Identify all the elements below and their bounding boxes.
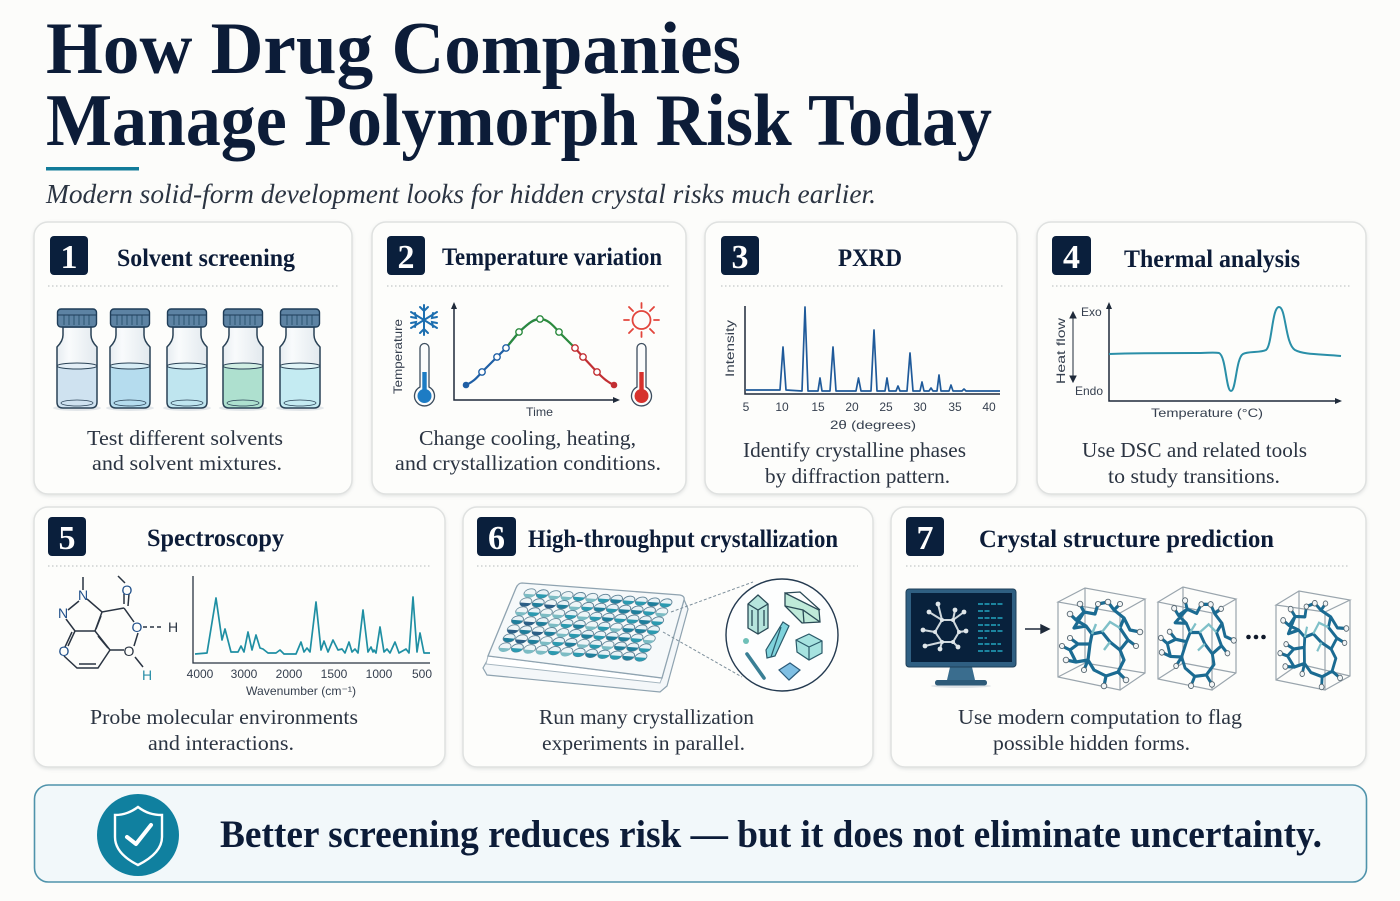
heading: PXRD	[838, 245, 902, 272]
crystal cell 1	[1058, 588, 1145, 690]
molecule structure: N	[58, 605, 68, 621]
description: Use modern computation to flag	[958, 705, 1242, 729]
description: and solvent mixtures.	[92, 451, 282, 475]
molecule structure	[58, 576, 178, 683]
description: Probe molecular environments	[90, 705, 358, 729]
badge 3	[721, 236, 759, 276]
description	[1082, 438, 1307, 488]
tiny speck	[743, 638, 749, 644]
molecule structure: O	[122, 582, 133, 598]
panel: high-throughput crystallization	[463, 507, 873, 767]
description: to study transitions.	[1108, 464, 1280, 488]
exo and endo labels	[1075, 305, 1103, 398]
molecule structure: H	[142, 667, 152, 683]
molecule structure: O	[132, 619, 143, 635]
panel: temperature variation	[372, 222, 686, 494]
description	[539, 705, 754, 755]
y axis label: Heat flow	[1054, 318, 1068, 384]
icon: hot thermometer	[632, 344, 652, 406]
badge 6: 6	[488, 520, 505, 557]
axis ticks	[743, 400, 996, 414]
axis ticks: 500	[412, 667, 432, 681]
icon: cold thermometer	[414, 344, 435, 406]
magnifier leader lines	[663, 582, 753, 677]
x axis label: 2θ (degrees)	[830, 418, 916, 432]
description	[90, 705, 358, 755]
icon: five solvent vials	[53, 309, 324, 411]
heading: Temperature variation	[442, 244, 662, 271]
flat tile crystal	[779, 663, 800, 680]
needle prism crystal	[766, 622, 789, 658]
description	[958, 705, 1242, 755]
description: Run many crystallization	[539, 705, 754, 729]
axis ticks: 40	[982, 400, 996, 414]
title	[46, 8, 992, 162]
axis ticks: 1500	[321, 667, 348, 681]
badge 4: 4	[1063, 239, 1080, 276]
badge 3: 3	[732, 239, 748, 276]
heading: High-throughput crystallization	[528, 526, 838, 553]
badge 4	[1052, 236, 1091, 276]
axis ticks: 1000	[366, 667, 393, 681]
molecule structure: H	[168, 619, 178, 635]
icon: shield with check	[97, 794, 179, 876]
line chart: temperature over time	[451, 302, 620, 403]
banner: key takeaway	[34, 785, 1366, 882]
thin rod crystal	[747, 654, 764, 678]
axis ticks: 25	[879, 400, 893, 414]
badge 1	[50, 236, 88, 276]
axis ticks: 30	[913, 400, 927, 414]
axis ticks: 10	[775, 400, 789, 414]
axis ticks: 2000	[276, 667, 303, 681]
panel: spectroscopy	[34, 507, 445, 767]
badge 5: 5	[58, 520, 76, 557]
x axis label: Time	[526, 405, 553, 419]
badge 7: 7	[916, 520, 934, 557]
panel: crystal structure prediction	[891, 507, 1366, 767]
cube crystal	[796, 634, 822, 660]
axis ticks: 20	[845, 400, 859, 414]
description: by diffraction pattern.	[765, 464, 950, 488]
description	[87, 426, 283, 475]
molecule structure: O	[59, 643, 70, 659]
axis ticks: 35	[948, 400, 962, 414]
description: possible hidden forms.	[993, 731, 1190, 755]
axis ticks: 4000	[187, 667, 214, 681]
description	[743, 438, 966, 488]
crystal cell 3	[1272, 591, 1356, 696]
panel: thermal analysis	[1037, 222, 1366, 494]
heat flow arrow	[1070, 312, 1076, 382]
description: and crystallization conditions.	[395, 451, 661, 475]
heading: Spectroscopy	[147, 525, 284, 552]
hexagonal prism crystal	[748, 595, 768, 634]
axis ticks: 3000	[231, 667, 258, 681]
molecule structure: N	[78, 587, 88, 603]
badge 2	[387, 236, 425, 276]
description: Test different solvents	[87, 426, 283, 450]
description: and interactions.	[148, 731, 294, 755]
panel: PXRD	[705, 222, 1017, 494]
exo and endo labels: Exo	[1081, 305, 1102, 319]
axis ticks	[187, 667, 432, 681]
heading: Thermal analysis	[1124, 246, 1300, 273]
badge 1: 1	[60, 239, 78, 276]
magnified crystals	[726, 579, 838, 691]
y axis label: Intensity	[723, 320, 737, 377]
crystal cell 2	[1150, 587, 1243, 697]
block crystal	[785, 592, 820, 623]
panel: solvent screening	[34, 222, 352, 494]
takeaway text: Better screening reduces risk — but it does not eliminate uncertainty.	[220, 813, 1322, 856]
description: Use DSC and related tools	[1082, 438, 1307, 462]
exo and endo labels: Endo	[1075, 384, 1103, 398]
heading: Solvent screening	[117, 245, 295, 272]
x axis label: Temperature (°C)	[1151, 406, 1263, 420]
icon: computer monitor	[906, 589, 1016, 688]
description: Identify crystalline phases	[743, 438, 966, 462]
heading: Crystal structure prediction	[979, 526, 1274, 553]
icon: well plate	[483, 583, 688, 692]
ellipsis	[1246, 635, 1266, 639]
icon: snowflake	[411, 305, 437, 335]
badge 6	[477, 517, 516, 557]
description: experiments in parallel.	[542, 731, 745, 755]
badge 7	[906, 517, 944, 557]
y axis label: Temperature	[391, 319, 405, 394]
chart: DSC curve	[1106, 302, 1342, 404]
axis ticks: 5	[743, 400, 750, 414]
axis ticks: 15	[811, 400, 825, 414]
chart: diffraction pattern	[745, 306, 1000, 394]
badge 5	[48, 517, 86, 557]
subtitle: Modern solid-form development looks for hidden crystal risks much earlier.	[45, 179, 876, 209]
arrow	[1025, 625, 1049, 633]
description	[395, 426, 661, 475]
title: How Drug Companies	[46, 8, 741, 90]
chart: spectrum	[193, 576, 430, 663]
molecule structure: O	[124, 643, 135, 659]
badge 2: 2	[398, 239, 414, 276]
title: Manage Polymorph Risk Today	[46, 80, 992, 162]
icon: sun	[624, 303, 659, 337]
description: Change cooling, heating,	[419, 426, 636, 450]
x axis label: Wavenumber (cm⁻¹)	[246, 684, 356, 698]
title accent rule	[46, 167, 139, 170]
